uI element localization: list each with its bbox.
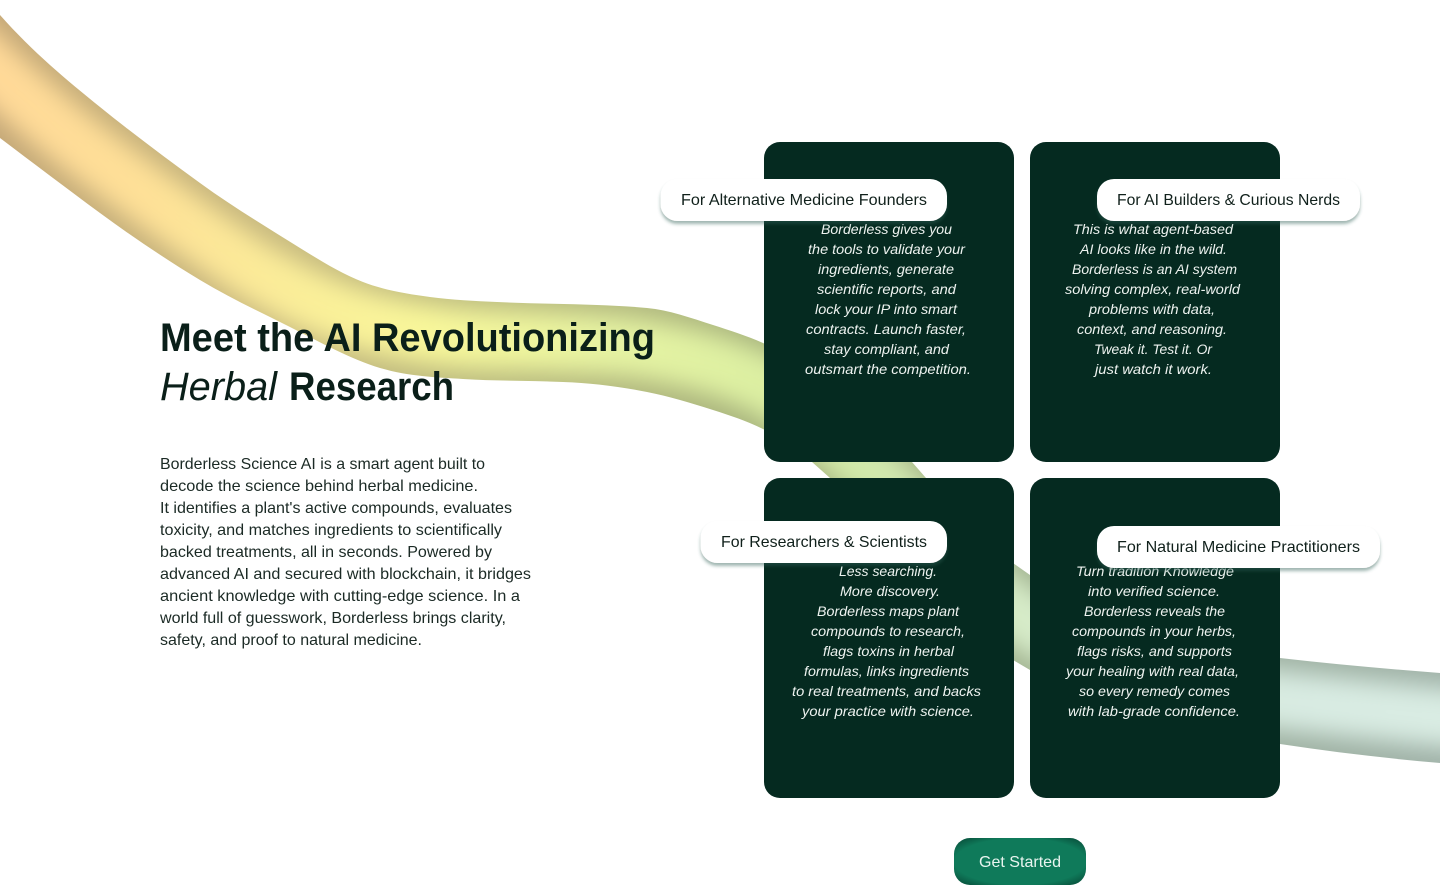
panel text: founders: the tools to validate your: [808, 241, 966, 257]
panel text: researchers: Less searching.: [839, 563, 937, 579]
panel text: researchers: More discovery.: [840, 583, 940, 599]
panel text: builders: AI looks like in the wild.: [1079, 241, 1227, 257]
panel text: practitioners: flags risks, and supports: [1077, 643, 1232, 659]
panel text: founders: [805, 221, 971, 377]
panel text: founders: ingredients, generate: [818, 261, 954, 277]
panel text: builders: problems with data,: [1088, 301, 1215, 317]
panel text: practitioners: into verified science.: [1088, 583, 1220, 599]
label pill: AI builders: For AI Builders & Curious Nerds: [1117, 192, 1340, 209]
button: get started: [954, 838, 1086, 885]
panel text: builders: just watch it work.: [1093, 361, 1212, 377]
label pill: AI builders: [1097, 179, 1360, 221]
panel text: founders: contracts. Launch faster,: [806, 321, 966, 337]
intro paragraph: world full of guesswork, Borderless brings clarity,: [159, 610, 506, 627]
title: Meet the AI Revolutionizing: [160, 316, 655, 360]
panel text: builders: This is what agent-based: [1073, 221, 1234, 237]
panel text: researchers: your practice with science.: [801, 703, 974, 719]
panel text: practitioners: with lab-grade confidence.: [1068, 703, 1240, 719]
label pill: natural medicine practitioners: For Natural Medicine Practitioners: [1117, 539, 1360, 556]
intro paragraph: toxicity, and matches ingredients to scientifically: [160, 522, 502, 539]
button: get started: Get Started: [979, 854, 1061, 871]
label pill: researchers and scientists: For Researchers & Scientists: [721, 534, 927, 551]
panel text: researchers: to real treatments, and backs: [792, 683, 981, 699]
panel text: practitioners: your healing with real data,: [1065, 663, 1239, 679]
panel text: builders: [1065, 221, 1241, 377]
panel: researchers and scientists: [764, 478, 1014, 798]
label pill: researchers and scientists: [700, 521, 947, 563]
panel text: builders: Borderless is an AI system: [1072, 261, 1237, 277]
panel text: researchers: formulas, links ingredients: [804, 663, 969, 679]
label pill: alternative medicine founders: For Alternative Medicine Founders: [681, 192, 927, 209]
panel text: practitioners: [1065, 563, 1240, 719]
panel: AI builders: [1030, 142, 1280, 462]
panel text: practitioners: Turn tradition Knowledge: [1076, 563, 1234, 579]
intro paragraph: [159, 456, 531, 649]
panel text: researchers: flags toxins in herbal: [823, 643, 955, 659]
intro paragraph: backed treatments, all in seconds. Powered by: [160, 544, 492, 561]
intro paragraph: decode the science behind herbal medicine.: [160, 478, 478, 495]
panel text: practitioners: Borderless reveals the: [1084, 603, 1225, 619]
panel: alternative medicine founders: [764, 142, 1014, 462]
panel text: builders: solving complex, real-world: [1065, 281, 1241, 297]
panel text: practitioners: so every remedy comes: [1079, 683, 1230, 699]
panel text: founders: stay compliant, and: [824, 341, 950, 357]
intro paragraph: safety, and proof to natural medicine.: [160, 632, 422, 649]
panel text: practitioners: compounds in your herbs,: [1072, 623, 1236, 639]
intro paragraph: ancient knowledge with cutting-edge science. In a: [160, 588, 520, 605]
intro paragraph: advanced AI and secured with blockchain, it bridges: [160, 566, 531, 583]
panel text: builders: context, and reasoning.: [1077, 321, 1227, 337]
intro paragraph: It identifies a plant's active compounds, evaluates: [160, 500, 512, 517]
panel: natural medicine practitioners: [1030, 478, 1280, 798]
label pill: alternative medicine founders: [660, 179, 947, 221]
title: Herbal: [160, 365, 278, 409]
title: [160, 316, 655, 409]
panel text: researchers: Borderless maps plant: [817, 603, 960, 619]
panel text: researchers: compounds to research,: [811, 623, 965, 639]
panel text: builders: Tweak it. Test it. Or: [1094, 341, 1213, 357]
panel text: founders: Borderless gives you: [821, 221, 952, 237]
panel text: founders: lock your IP into smart: [815, 301, 958, 317]
panel text: founders: scientific reports, and: [817, 281, 957, 297]
panel text: founders: outsmart the competition.: [805, 361, 971, 377]
label pill: natural medicine practitioners: [1097, 526, 1380, 568]
title: Research: [289, 365, 454, 409]
intro paragraph: Borderless Science AI is a smart agent built to: [160, 456, 485, 473]
panel text: researchers: [792, 563, 981, 719]
